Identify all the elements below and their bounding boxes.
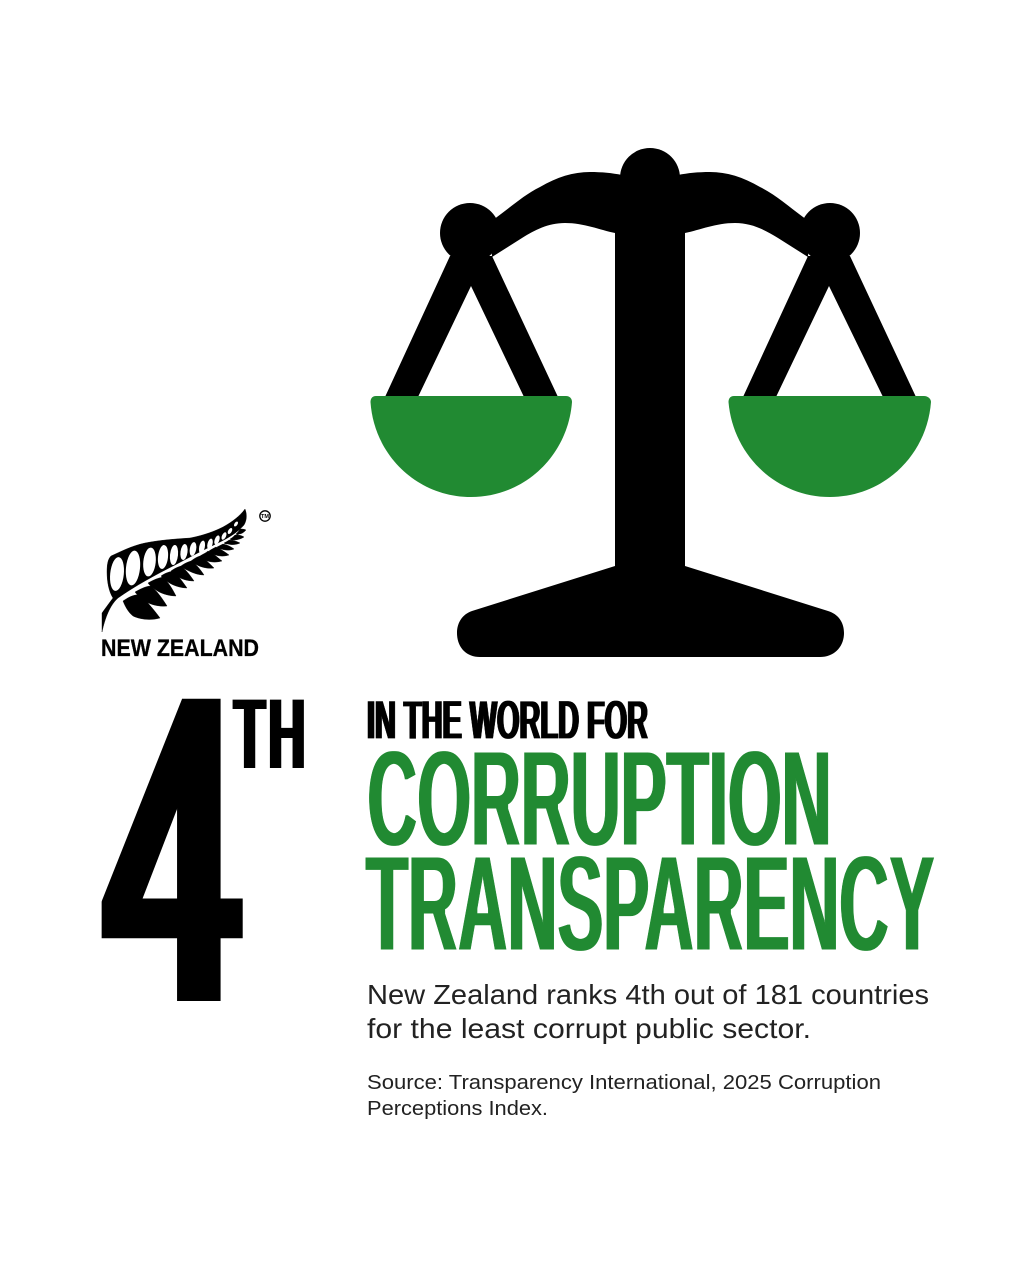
heading line: in the world for: IN THE WORLD FOR [367, 688, 648, 751]
ordinal suffix: TH [234, 678, 305, 792]
left pivot circle [440, 203, 500, 263]
description text [367, 979, 929, 1044]
scale beam, post and base [457, 172, 844, 657]
big rank numeral: 4 [104, 598, 240, 1099]
right pan hanger [743, 256, 916, 397]
fern frond [102, 509, 246, 632]
trademark symbol [260, 511, 270, 521]
left pan [370, 396, 572, 497]
description text: for the least corrupt public sector. [367, 1013, 811, 1044]
source note: Perceptions Index. [367, 1097, 548, 1120]
logo wordmark: NEW ZEALAND [101, 635, 259, 662]
big rank numeral [95, 598, 240, 1099]
right pan [728, 396, 931, 497]
source note: Source: Transparency International, 2025 Corruption [367, 1071, 881, 1094]
logo: New Zealand fern mark [101, 509, 270, 662]
icon: balance scales [370, 148, 931, 657]
source note [367, 1071, 881, 1120]
right pivot circle [800, 203, 860, 263]
left pan hanger [385, 256, 558, 397]
trademark symbol: TM [261, 514, 269, 520]
top pivot circle [620, 148, 680, 208]
description text: New Zealand ranks 4th out of 181 countries [367, 979, 929, 1010]
